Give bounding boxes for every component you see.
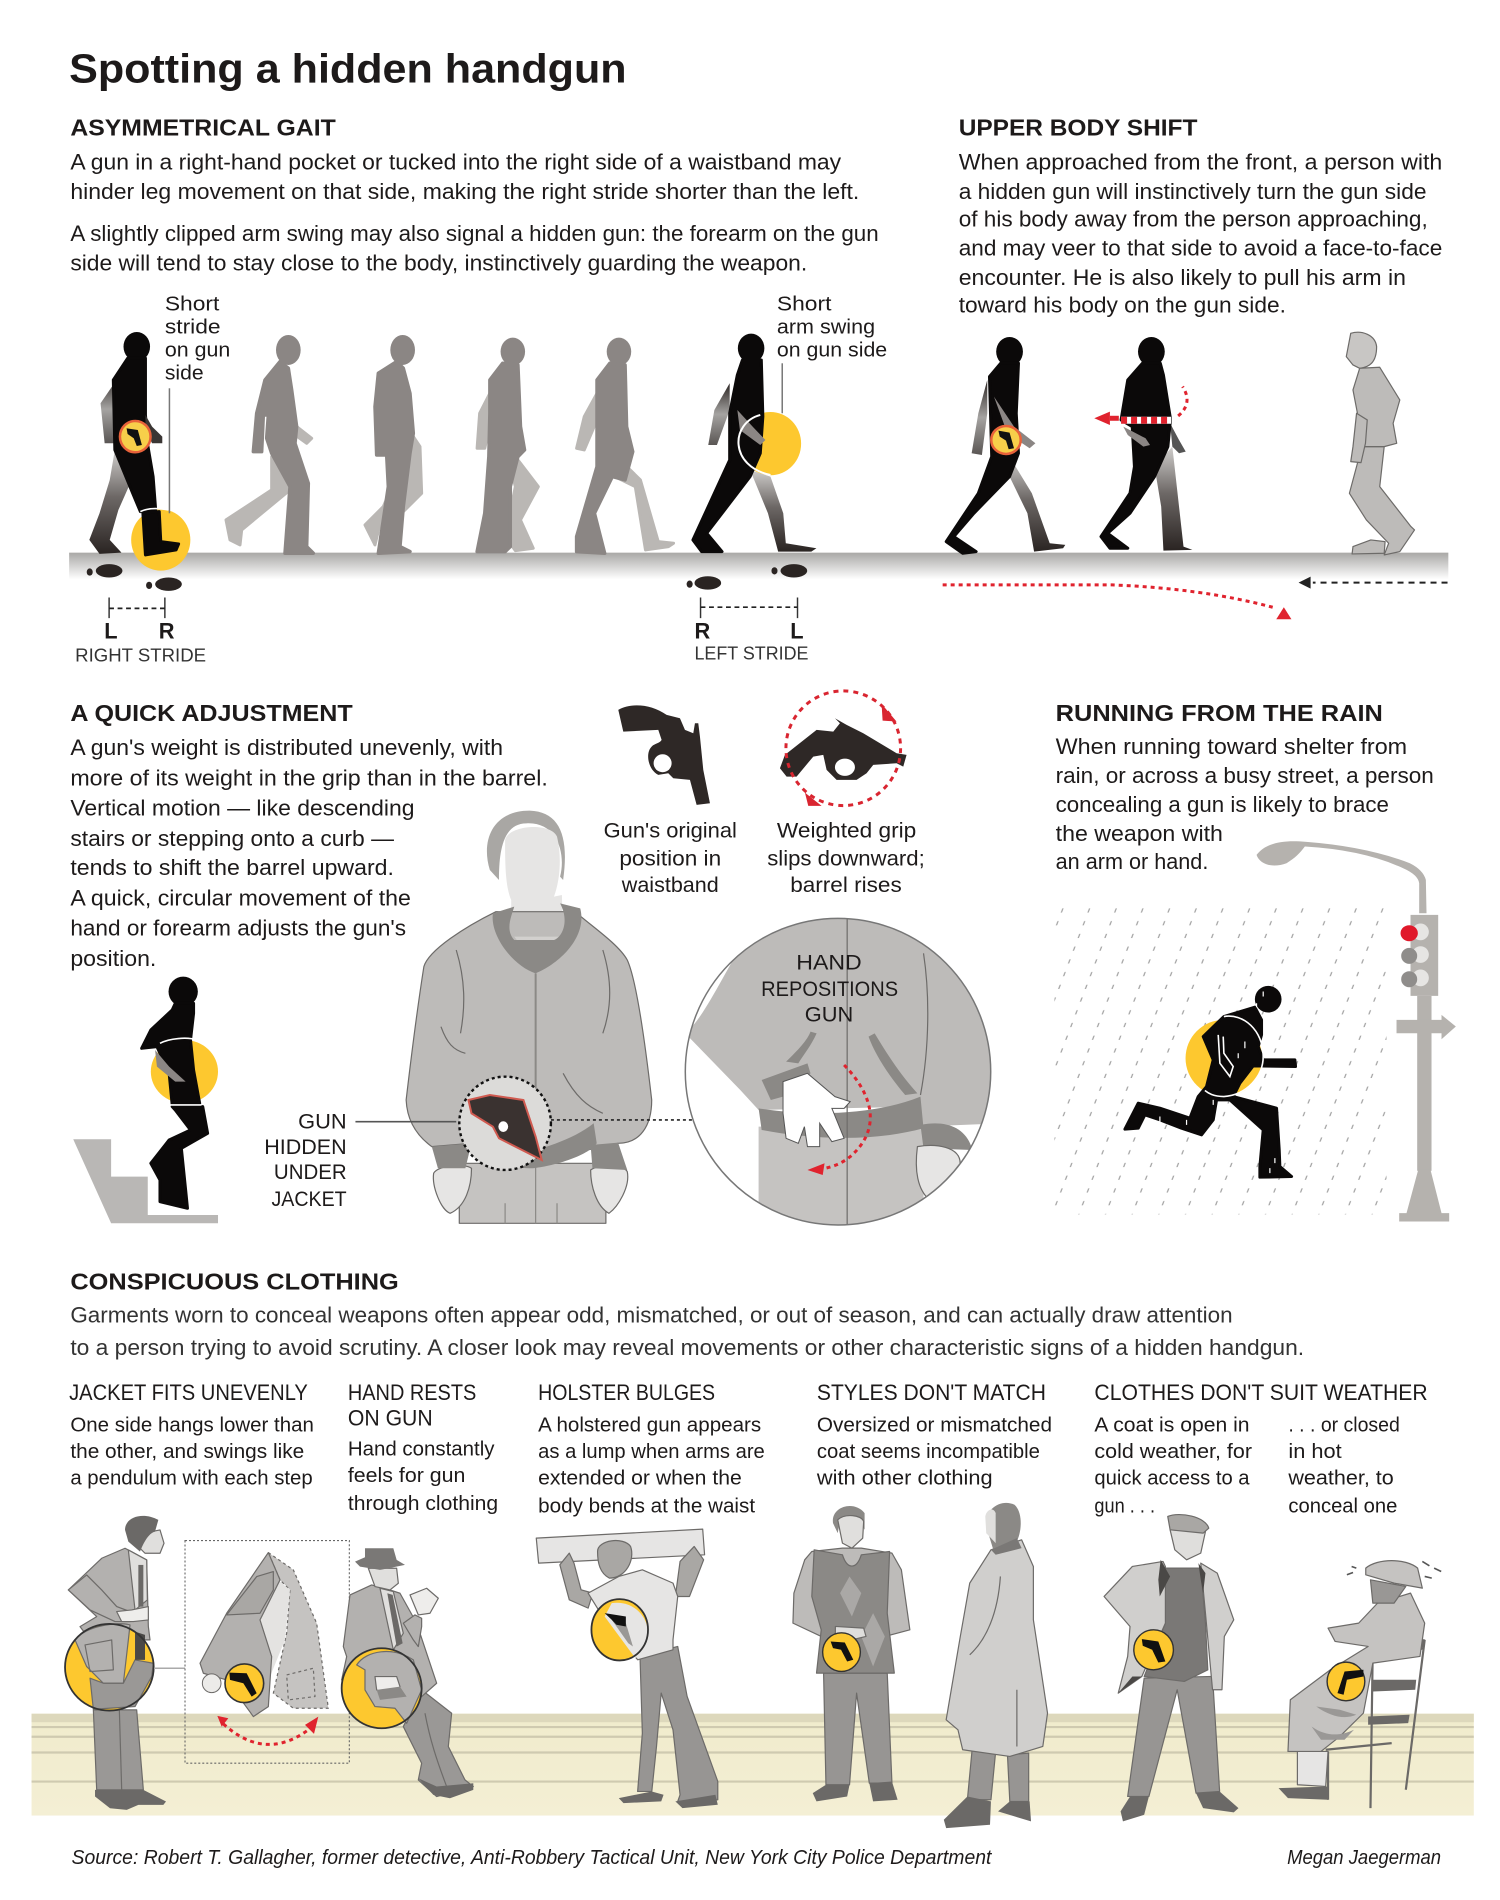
column: jacket fits unevenly: the other, and swings like [70,1440,304,1463]
column: hand rests on gun: HAND RESTS [348,1380,476,1405]
column: jacket fits unevenly: a pendulum with each step [70,1467,313,1490]
man 5: mismatched long coat [944,1503,1048,1828]
column: hand rests on gun [348,1380,498,1515]
text block: rain description: an arm or hand. [1056,849,1208,874]
footprints: right stride [87,564,182,591]
column: styles don't match: STYLES DON'T MATCH [817,1380,1046,1405]
text block: rain description: the weapon with [1056,821,1223,846]
text block: gait description: side will tend to stay close to the body, instinctively guarding the weapon. [70,250,807,275]
callout: short arm swing on gun side: Short [777,292,832,315]
text block: adjustment description [70,735,548,971]
callout: short stride on gun side: Short [165,292,220,315]
text block: clothing description [70,1302,1304,1360]
caption: gun's original position: Gun's original [604,819,737,842]
man 2: hand rests on gun [342,1548,473,1798]
column: jacket fits unevenly: JACKET FITS UNEVENLY [69,1380,308,1405]
walker 1 with short stride [89,332,190,571]
caption: weighted grip slips: barrel rises [790,874,902,897]
text block: adjustment description: tends to shift the barrel upward. [70,855,394,880]
text block: rain description: rain, or across a busy street, a person [1056,763,1434,788]
column: holster bulges [538,1380,765,1518]
illustration: street lamp, signal and runner [1125,841,1456,1222]
text block: gait description: hinder leg movement on that side, making the right stride shorter than the left. [70,179,859,204]
heading: asymmetrical gait: ASYMMETRICAL GAIT [70,115,336,141]
panel: asymmetrical gait text [70,115,879,275]
text block: upper body description: and may veer to that side to avoid a face-to-face [959,236,1442,261]
caption: weighted grip slips: slips downward; [767,847,925,870]
label: hand repositions gun: REPOSITIONS [761,978,898,1001]
label: gun hidden under jacket: GUN [298,1110,347,1133]
measure: right stride: RIGHT STRIDE [75,646,206,666]
column: styles don't match: Oversized or mismatched [817,1413,1052,1436]
man 1: jacket hangs unevenly [65,1516,166,1810]
column: holster bulges: A holstered gun appears [538,1413,761,1436]
walker with gun facing forward [946,337,1065,553]
source credit: Source: Robert T. Gallagher, former detective, Anti-Robbery Tactical Unit, New York City Police Department [72,1846,993,1869]
rain field [1054,902,1387,1214]
callout: short arm swing on gun side: on gun side [777,338,887,361]
text block: clothing description: Garments worn to conceal weapons often appear odd, mismatched, or out of season, and can actually draw attention [70,1302,1233,1327]
walker turning torso away [1094,337,1192,551]
text block: upper body description: a hidden gun will instinctively turn the gun side [959,179,1427,204]
illustration: man 3, holster bulges [536,1529,718,1808]
approaching person [1346,332,1415,555]
caption: gun's original position: position in [619,847,721,870]
text block: adjustment description: hand or forearm adjusts the gun's [70,916,406,941]
stairs [73,1139,218,1223]
column: clothes don't suit weather: . . . or closed [1288,1413,1400,1436]
label: gun hidden under jacket [264,1110,347,1211]
column: clothes don't suit weather: cold weather, for [1094,1440,1252,1463]
text block: upper body description [959,150,1442,318]
callout: short stride on gun side: side [165,361,204,384]
heading: conspicuous clothing: CONSPICUOUS CLOTHING [70,1269,399,1295]
walker 4 [477,338,538,552]
callout: short arm swing on gun side [777,292,887,361]
text block: upper body description: encounter. He is also likely to pull his arm in [959,265,1406,290]
icon: gun in original position [618,705,710,805]
text block: adjustment description: A quick, circular movement of the [70,885,411,910]
runner [1125,986,1296,1177]
illustrations: clothing figures right [793,1503,1441,1828]
text block: adjustment description: A gun's weight is distributed unevenly, with [70,735,503,760]
label: gun hidden under jacket: JACKET [272,1188,347,1211]
column: jacket fits unevenly: One side hangs lower than [70,1413,314,1436]
column: hand rests on gun: feels for gun [348,1464,465,1487]
inset: yellow highlight on jacket [65,1624,154,1711]
column: styles don't match [816,1380,1052,1490]
heading: upper body shift: UPPER BODY SHIFT [959,115,1197,141]
label: hand repositions gun: HAND [796,952,862,975]
figure stepping down stairs [142,977,218,1208]
panel: a quick adjustment text [70,700,548,971]
column: clothes don't suit weather: A coat is open in [1094,1413,1250,1436]
man in jacket [406,811,652,1223]
column: styles don't match: coat seems incompatible [817,1440,1040,1463]
text block: gait description [70,150,879,275]
measure: left stride: LEFT STRIDE [694,643,808,663]
measure: left stride: L [790,619,804,644]
panel: conspicuous clothing text [70,1269,1304,1360]
column: clothes don't suit weather [1094,1380,1428,1518]
column: clothes don't suit weather: gun . . . [1094,1495,1155,1518]
man 7: seated, coat closed in hot weather [1279,1561,1441,1808]
path arrow: approach in black [1299,577,1448,589]
caption: gun's original position [604,819,737,897]
connector to jacket detail [154,1667,185,1669]
panel: upper body shift text [959,115,1442,318]
column: hand rests on gun: ON GUN [348,1405,433,1430]
heading: running from the rain: RUNNING FROM THE RAIN [1056,700,1383,726]
chart: gait sequence of walkers [89,332,816,571]
text block: adjustment description: more of its weight in the grip than in the barrel. [70,765,548,790]
inset: yellow highlight at holster [591,1599,648,1660]
text block: adjustment description: position. [70,946,156,971]
label: hand repositions gun: GUN [805,1004,853,1027]
illustrations: clothing figures left [65,1516,473,1810]
illustration: gun diagrams [618,691,907,806]
measure: right stride: R [159,619,175,644]
text block: rain description [1056,734,1434,874]
callout: short stride on gun side: on gun [165,338,230,361]
ground strip [69,553,1448,579]
column: hand rests on gun: Hand constantly [348,1438,495,1461]
column: clothes don't suit weather: in hot [1288,1440,1342,1463]
footprints and stride measures [75,564,808,666]
column: clothes don't suit weather: weather, to [1287,1467,1394,1490]
text block: adjustment description: Vertical motion — like descending [70,796,415,821]
byline: Megan Jaegerman [1287,1846,1441,1869]
floor band [32,1714,1474,1816]
callout: short arm swing on gun side: arm swing [777,315,875,338]
measure: right stride [75,597,206,666]
label: hand repositions gun [761,952,898,1027]
magnifier: hand repositions gun [685,913,1003,1227]
column: styles don't match: with other clothing [816,1467,993,1490]
column: holster bulges: body bends at the waist [538,1495,755,1518]
column: clothes don't suit weather: conceal one [1288,1495,1397,1518]
pointer lines from gun [355,1120,756,1122]
text block: clothing description: to a person trying to avoid scrutiny. A closer look may reveal movements or other characteristic signs of a hidden handgun. [70,1335,1304,1360]
column: holster bulges: HOLSTER BULGES [538,1380,715,1405]
callout: short stride on gun side: stride [165,315,221,338]
caption: weighted grip slips: Weighted grip [777,819,916,842]
footprints: left stride [687,564,807,590]
column: holster bulges: extended or when the [538,1467,742,1490]
title: Spotting a hidden handgun [69,45,627,91]
measure: left stride [694,597,808,663]
inset: yellow highlight at hip [342,1648,422,1728]
text block: rain description: concealing a gun is likely to brace [1056,792,1389,817]
column: hand rests on gun: through clothing [348,1492,498,1515]
walker 6 with short arm swing [693,334,816,552]
text block: rain description: When running toward shelter from [1056,734,1407,759]
heading: a quick adjustment: A QUICK ADJUSTMENT [70,700,353,726]
text block: adjustment description: stairs or stepping onto a curb — [70,826,395,851]
walker 2 [226,335,313,553]
text block: upper body description: of his body away from the person approaching, [959,207,1428,232]
chart: upper body shift figures [943,332,1448,619]
man 6: coat open in cold weather [1104,1515,1238,1821]
man 4: oversized vest [793,1506,910,1801]
red rotation band [1094,387,1187,425]
caption: weighted grip slips [767,819,925,897]
jacket swing detail [185,1541,349,1763]
text block: gait description: A slightly clipped arm swing may also signal a hidden gun: the forearm on the gun [70,221,879,246]
magnified gun under jacket [459,1077,551,1170]
path arrow: veering away in red [943,585,1291,619]
text block: upper body description: toward his body on the gun side. [959,293,1286,318]
callout: short stride on gun side [165,292,230,384]
walker 3 [365,335,422,553]
street lamp and traffic signal [1257,841,1456,1222]
column: clothes don't suit weather: CLOTHES DON'T SUIT WEATHER [1094,1380,1428,1405]
text block: upper body description: When approached from the front, a person with [959,150,1442,175]
text block: gait description: A gun in a right-hand pocket or tucked into the right side of a waistband may [70,150,842,175]
column: clothes don't suit weather: quick access to a [1094,1467,1250,1490]
illustration group: quick adjustment figures [73,811,1003,1227]
label: gun hidden under jacket: HIDDEN [264,1136,347,1159]
icon: gun slipping with rotation arrows [780,691,907,806]
column: holster bulges: as a lump when arms are [538,1440,765,1463]
column: jacket fits unevenly [69,1380,314,1490]
label: gun hidden under jacket: UNDER [274,1161,347,1184]
walker 5 [577,338,674,553]
measure: right stride: L [104,619,118,644]
caption: gun's original position: waistband [621,874,719,897]
panel: running from the rain text [1056,700,1434,874]
measure: left stride: R [694,619,710,644]
